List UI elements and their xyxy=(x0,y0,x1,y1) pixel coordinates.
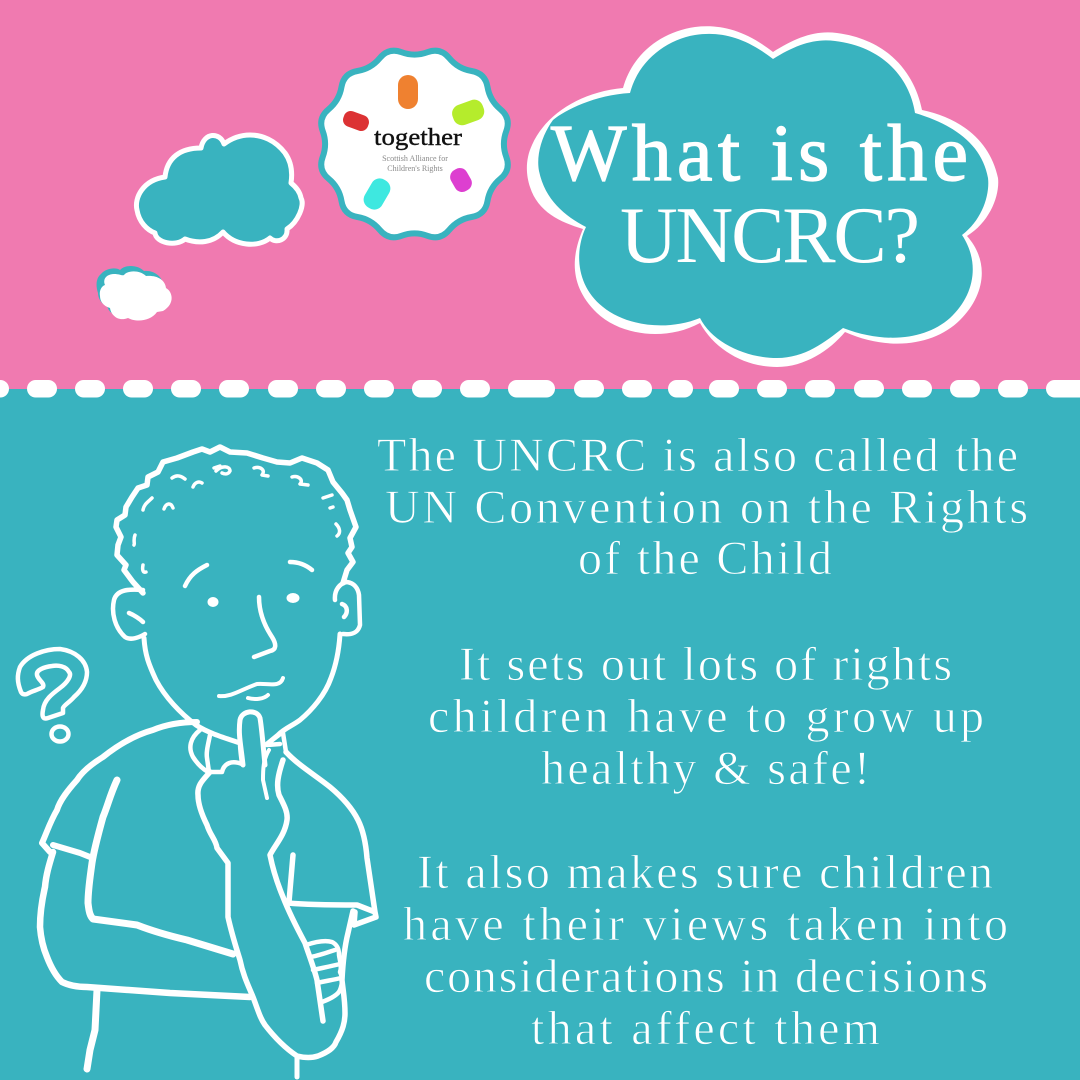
fingerprint: green xyxy=(450,97,487,128)
paragraph 2: children have to grow up xyxy=(428,690,984,743)
fingerprint: cyan xyxy=(360,175,394,213)
title cloud xyxy=(527,26,998,367)
shoulder and sleeve xyxy=(42,722,197,857)
paragraph 3 xyxy=(403,846,1008,1055)
face outline xyxy=(144,634,340,744)
fingerprint: magenta xyxy=(447,165,475,195)
hair xyxy=(116,447,356,593)
left ear xyxy=(113,590,145,639)
body text xyxy=(377,429,1028,1055)
paragraph 1: The UNCRC is also called the xyxy=(377,429,1018,482)
eyes xyxy=(208,593,300,607)
ear details xyxy=(129,604,347,622)
logo badge: together xyxy=(321,51,508,237)
paragraph 3: considerations in decisions xyxy=(424,950,988,1003)
paragraph 3: have their views taken into xyxy=(403,898,1008,951)
raised finger xyxy=(239,712,265,765)
title text: What is the xyxy=(551,110,968,198)
scalloped badge xyxy=(321,51,508,237)
lower torso right xyxy=(294,1058,300,1077)
eyebrows xyxy=(185,562,312,586)
fingerprint: red xyxy=(341,109,371,133)
paragraph 2: healthy & safe! xyxy=(541,742,870,795)
paragraph 2 xyxy=(428,638,984,795)
right shoulder and sleeve xyxy=(286,752,376,925)
cloud outline xyxy=(527,26,998,367)
lower torso xyxy=(87,990,97,1069)
logo wordmark: together xyxy=(374,125,462,151)
cloud fill xyxy=(538,34,988,358)
dashed divider xyxy=(0,380,1080,398)
gripping fingers xyxy=(306,941,342,1002)
right ear xyxy=(335,582,360,634)
tiny white thought cloud xyxy=(97,266,172,320)
paragraph 1: of the Child xyxy=(578,532,832,585)
hair curls xyxy=(134,466,340,572)
question mark icon xyxy=(18,649,87,742)
paragraph 1 xyxy=(377,429,1028,585)
collar xyxy=(190,730,286,772)
mouth xyxy=(219,678,283,699)
paragraph 2: It sets out lots of rights xyxy=(459,638,952,691)
nose xyxy=(254,597,275,657)
outer arm xyxy=(40,852,250,997)
finger shadow xyxy=(263,750,269,798)
logo strapline: Scottish Alliance for xyxy=(382,154,448,163)
title cloud: UNCRC? xyxy=(620,192,920,280)
small teal thought cloud xyxy=(136,135,302,244)
thinking child illustration xyxy=(40,447,376,1077)
forearm, right edge xyxy=(270,760,323,1021)
paragraph 3: It also makes sure children xyxy=(417,846,993,899)
forearm, left edge and elbow xyxy=(198,772,353,1058)
fingerprint: orange xyxy=(398,75,418,109)
paragraph 1: UN Convention on the Rights xyxy=(385,481,1028,534)
side of torso xyxy=(88,780,233,954)
paragraph 3: that affect them xyxy=(531,1002,880,1055)
logo strapline: Children's Rights xyxy=(387,164,443,173)
